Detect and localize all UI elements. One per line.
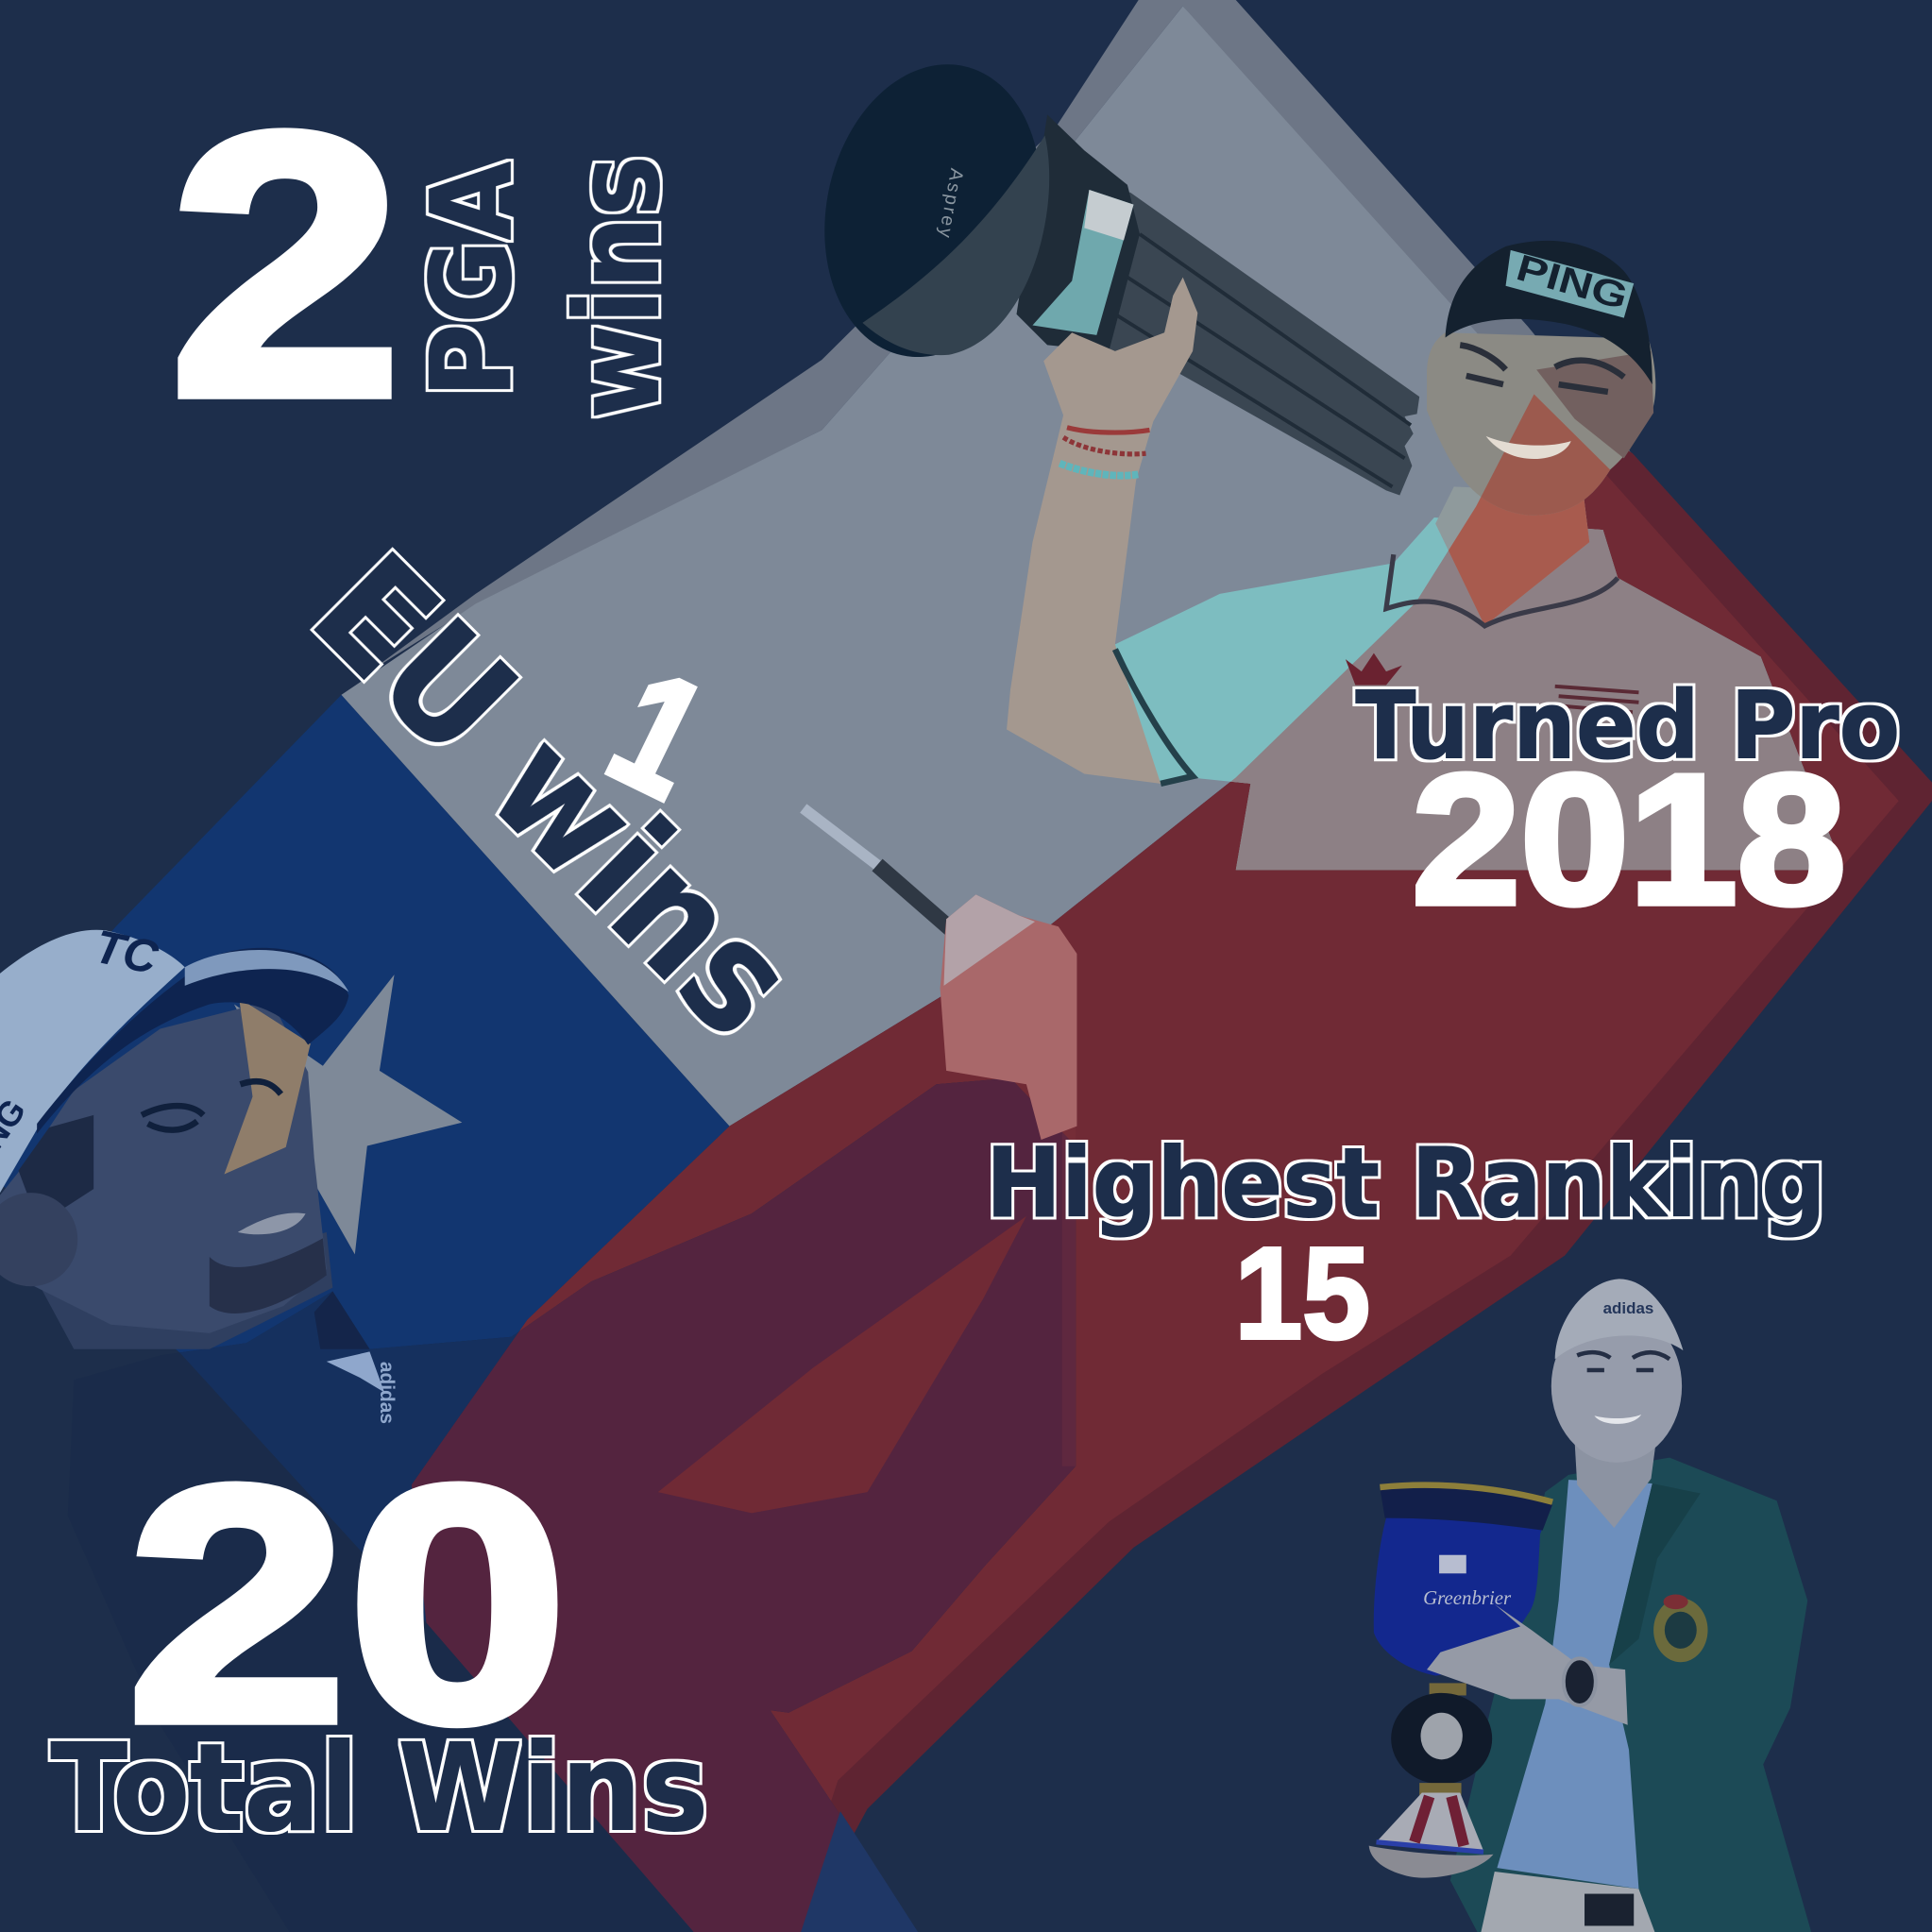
adidas cap logo: adidas <box>1603 1299 1653 1317</box>
hand under trophy <box>1369 1846 1493 1878</box>
nose highlight <box>224 998 311 1175</box>
flag: star <box>234 974 462 1254</box>
body over red <box>412 1079 1076 1932</box>
club shaft <box>804 808 877 865</box>
jacket crest <box>1653 1594 1708 1662</box>
value 2018: 2018 <box>1412 737 1846 942</box>
face over red <box>1481 395 1610 516</box>
beard <box>210 1238 327 1313</box>
stat: 20 total wins <box>50 1418 708 1859</box>
number 2: 2 <box>169 57 403 475</box>
photo edge strip <box>1062 955 1076 1466</box>
cap logo: TC <box>91 920 163 985</box>
trophy sphere <box>1391 1693 1492 1784</box>
cup gold rim <box>1380 1485 1552 1502</box>
jacket lapel <box>1609 1483 1701 1665</box>
label EU wins: EU wins <box>280 521 828 1070</box>
eyes and brows <box>1577 1352 1669 1370</box>
white cap <box>1555 1279 1683 1359</box>
adidas logo on shoulder <box>327 1351 398 1424</box>
value 15: 15 <box>1234 1221 1370 1366</box>
trophy base disc <box>798 44 1067 378</box>
belt buckle <box>1585 1894 1634 1925</box>
crest centre <box>1665 1612 1697 1649</box>
adidas word: adidas <box>376 1362 398 1424</box>
label wins: wins <box>551 155 686 419</box>
sphere plaque <box>1420 1713 1463 1759</box>
photo: player lifting trophy <box>798 44 1843 870</box>
shirt <box>1497 1480 1652 1889</box>
body base <box>68 1078 1076 1932</box>
striped foot <box>1377 1793 1483 1851</box>
foot blue base <box>1377 1842 1483 1852</box>
club grip <box>877 865 955 933</box>
prong lines <box>1115 234 1411 486</box>
teal bracelet <box>1059 464 1139 476</box>
cup engraving <box>1423 1555 1512 1609</box>
polo shirt <box>1115 517 1843 870</box>
stat: highest ranking 15 <box>986 1128 1826 1366</box>
flag: white band outer edge <box>369 0 1638 671</box>
crest body <box>1653 1598 1708 1662</box>
upper right face tint <box>1536 351 1653 458</box>
polo shirt over red <box>1231 529 1843 871</box>
pants <box>1481 1872 1654 1932</box>
cap <box>1446 241 1652 384</box>
neck <box>1575 1442 1656 1528</box>
face <box>1551 1310 1682 1463</box>
beaded bracelet <box>1063 437 1146 454</box>
body over blue <box>179 1292 518 1622</box>
cup glass <box>1374 1483 1552 1676</box>
gripping hand <box>941 894 1076 1140</box>
eyes and brows <box>142 1081 281 1130</box>
flag: blue canton <box>0 695 729 1622</box>
trophy <box>798 44 1419 496</box>
stat: 2 PGA wins <box>169 57 686 475</box>
engraved text: Greenbrier <box>1423 1586 1512 1609</box>
value 20: 20 <box>127 1418 568 1792</box>
shirt logo <box>1346 653 1402 685</box>
mouth <box>238 1212 306 1234</box>
face <box>0 1001 327 1333</box>
arm and hand <box>1007 278 1197 784</box>
stat: 1 EU wins <box>280 521 828 1070</box>
PING logo: PING <box>1512 247 1632 318</box>
trophy prongs <box>1047 193 1419 496</box>
label PGA: PGA <box>407 161 536 398</box>
cap brim <box>37 948 348 1133</box>
trophy silver band <box>1032 190 1133 335</box>
brim top <box>185 950 348 991</box>
eyes and brows <box>1460 345 1624 392</box>
trophy band highlight <box>1084 190 1133 240</box>
foot red stripes <box>1415 1796 1464 1846</box>
cup band <box>1380 1487 1552 1531</box>
adidas stripes <box>327 1351 384 1392</box>
hand and forearm on trophy <box>1427 1604 1628 1725</box>
golf club <box>804 808 955 933</box>
flag: red band <box>412 395 1899 1932</box>
jacket <box>1450 1458 1811 1932</box>
hand over white stripe <box>944 894 1035 986</box>
neck and jaw <box>31 1232 332 1349</box>
watch <box>1564 1658 1596 1705</box>
photo: player with green jacket and trophy <box>1369 1279 1811 1932</box>
cap logo panel <box>1506 250 1634 318</box>
bracelets <box>1059 428 1149 476</box>
crest crown <box>1664 1594 1688 1609</box>
flag: red band shadow edge <box>412 388 1932 1932</box>
chest flag logo <box>1555 686 1638 712</box>
trophy cup <box>1374 1483 1552 1852</box>
neck <box>1435 486 1589 626</box>
Asprey engraving: Asprey <box>934 167 967 242</box>
collar knot <box>1430 1683 1466 1695</box>
engraved building <box>1439 1555 1466 1573</box>
stat: turned pro 2018 <box>1355 671 1900 942</box>
flag: white band <box>341 7 1537 1127</box>
trophy neck <box>1016 114 1140 351</box>
gap between arms <box>658 1216 1026 1513</box>
lower blue stripe <box>801 1811 918 1932</box>
label Highest Ranking: Highest Ranking <box>986 1128 1826 1240</box>
number 1: 1 <box>585 636 732 834</box>
smile <box>1486 436 1571 459</box>
white cap <box>0 930 185 1193</box>
collar <box>314 1291 369 1349</box>
red bracelet <box>1067 428 1149 432</box>
disc part over flag <box>862 136 1049 355</box>
label Total Wins: Total Wins <box>50 1719 708 1859</box>
label Turned Pro: Turned Pro <box>1355 671 1900 780</box>
ear <box>0 1193 77 1286</box>
hair <box>19 1115 93 1220</box>
neck over red <box>1449 497 1590 623</box>
gold collar <box>1419 1783 1462 1795</box>
smile <box>1594 1415 1641 1424</box>
face <box>1427 332 1655 516</box>
photo: golfer swinging <box>0 808 1076 1932</box>
collar <box>1386 554 1618 626</box>
sleeve hem <box>1115 650 1193 784</box>
